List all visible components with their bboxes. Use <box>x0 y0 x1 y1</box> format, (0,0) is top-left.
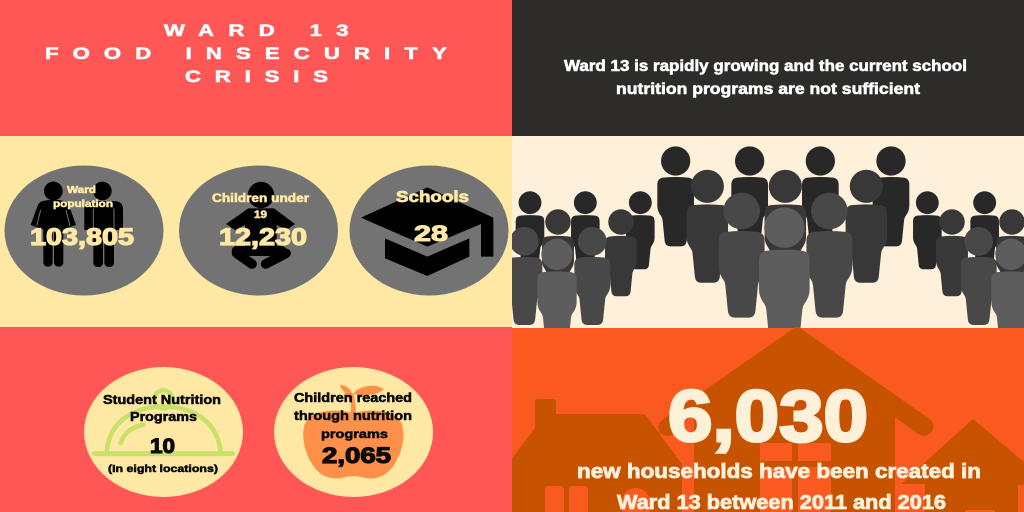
stat: ward population: 103,805 <box>30 224 134 251</box>
house: centre <box>658 326 934 512</box>
stat: schools: 28 <box>414 221 448 246</box>
title: FOOD INSECURITY <box>45 44 447 63</box>
panel: crowd background <box>512 136 1024 328</box>
stat: children under 19 <box>179 166 338 296</box>
stat: ward population: Ward <box>67 185 96 196</box>
big number: new households: 6,030 <box>668 377 868 457</box>
stat: children reached <box>274 367 433 497</box>
panel: title background <box>0 0 512 136</box>
panel: statistics background <box>0 136 512 327</box>
stat: student nutrition programs: (In eight locations) <box>108 463 218 475</box>
icon: couple <box>31 182 123 267</box>
stat: children reached: programs <box>321 427 388 441</box>
stat: children reached: through nutrition <box>294 408 412 423</box>
icon: baby <box>226 182 295 264</box>
stat: children reached: Children reached <box>294 390 412 405</box>
stat: ward population <box>4 166 164 296</box>
summary heading <box>564 58 967 98</box>
icon: apple <box>303 385 403 478</box>
stat: children under 19: 12,230 <box>219 224 307 251</box>
panel: summary background <box>512 0 1024 136</box>
title: CRISIS <box>185 67 328 86</box>
icon: graduation cap <box>361 187 493 276</box>
illustration: houses <box>512 326 1024 512</box>
icon: food cloche <box>94 390 232 454</box>
households caption <box>577 461 981 512</box>
panel: nutrition background <box>0 327 512 512</box>
stat: student nutrition programs: Programs <box>130 409 197 424</box>
title: WARD 13 <box>164 21 349 40</box>
house: right <box>901 419 1024 512</box>
stat: schools <box>350 166 508 296</box>
stat: student nutrition programs: Student Nutrition <box>103 392 221 407</box>
stat: children under 19: 19 <box>254 209 267 221</box>
stat: student nutrition programs: 10 <box>150 435 175 458</box>
summary heading: Ward 13 is rapidly growing and the current school <box>564 58 967 75</box>
stat: student nutrition programs <box>84 367 243 497</box>
summary heading: nutrition programs are not sufficient <box>616 81 921 98</box>
title <box>45 21 447 86</box>
households caption: new households have been created in <box>577 461 981 483</box>
stat: children reached: 2,065 <box>322 443 391 468</box>
stat: ward population: population <box>53 199 113 210</box>
panel: households background <box>512 328 1024 512</box>
stat: schools: Schools <box>396 189 469 206</box>
stat: children under 19: Children under <box>212 193 310 205</box>
house: left <box>512 399 682 512</box>
illustration: crowd of people <box>506 146 1024 346</box>
